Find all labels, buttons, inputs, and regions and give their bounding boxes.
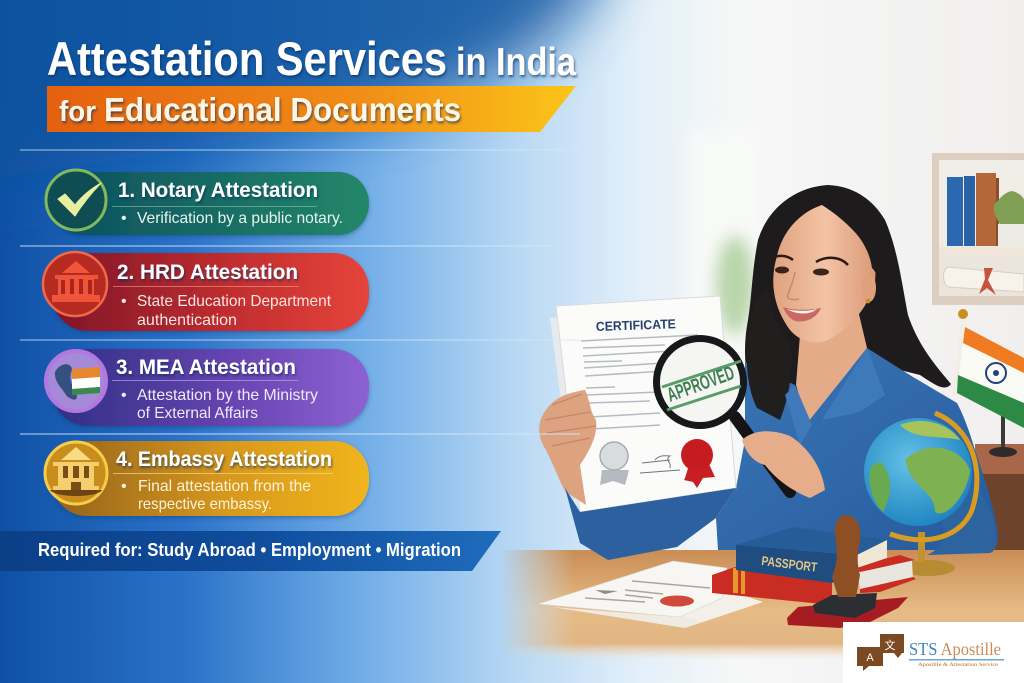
magnifying glass: [656, 338, 790, 492]
translate bubbles icon: [857, 634, 904, 671]
translate bubbles icon: A: [866, 652, 874, 664]
description: Verification by a public notary.: [137, 210, 343, 227]
cabinet: [975, 474, 1024, 554]
description: •: [121, 478, 127, 495]
heading: 4. Embassy Attestation: [116, 448, 332, 471]
description: of External Affairs: [137, 405, 258, 422]
hair back: [745, 185, 951, 420]
front hair strand over shoulder: [747, 290, 792, 420]
description: Final attestation from the: [138, 478, 311, 495]
left shirt sleeve: [565, 488, 736, 560]
collar: [785, 348, 885, 445]
desk papers: [538, 561, 763, 628]
subtitle ribbon: Educational Documents: [104, 91, 461, 128]
required for ribbon: [0, 531, 501, 571]
nose and smile: [788, 272, 799, 300]
woman: [716, 185, 998, 556]
icon: gold embassy: [45, 442, 107, 504]
description: Attestation by the Ministry: [137, 387, 318, 404]
passport and books: [712, 527, 916, 605]
required for ribbon: Required for: Study Abroad • Employment • Migration: [38, 540, 461, 560]
title: in India: [456, 41, 576, 84]
translate bubbles icon: 文: [884, 638, 896, 652]
rubber stamp on red pad: [787, 515, 908, 628]
front hair: [760, 190, 893, 340]
heading: 1. Notary Attestation: [118, 179, 318, 202]
divider lines: [20, 149, 610, 435]
globe: [864, 413, 977, 576]
ear and earring: [862, 274, 876, 302]
subtitle ribbon: for: [59, 96, 96, 128]
desk: [500, 550, 1024, 660]
logo panel: [843, 622, 1024, 683]
shelf with books, plant and scroll: [932, 153, 1024, 305]
panel: hrd attestation: [43, 252, 369, 331]
neck: [796, 310, 867, 423]
indian flag on stand: [955, 309, 1024, 457]
silver seal: [600, 442, 629, 485]
signature: [640, 456, 680, 473]
right hand: [742, 431, 825, 498]
cabinet top: [975, 444, 1024, 474]
window backdrop: [690, 130, 760, 370]
description: authentication: [137, 312, 237, 329]
red seal: [681, 439, 715, 488]
left hand: [539, 390, 596, 505]
icon: red government building: [43, 252, 107, 316]
description: •: [121, 387, 127, 404]
approved stamp text: APPROVED: [664, 362, 737, 407]
heading: 2. HRD Attestation: [117, 261, 298, 284]
certificate: [550, 296, 736, 512]
shirt: [716, 348, 998, 556]
icon: flag and globe: [46, 351, 106, 411]
icon: check mark: [46, 170, 106, 230]
brand name: STS Apostille: [909, 639, 1001, 659]
title: Attestation Services: [47, 32, 447, 85]
panel: mea attestation: [46, 349, 369, 426]
description: •: [121, 293, 127, 310]
brows and eyes: [772, 256, 848, 265]
subtitle ribbon: [47, 86, 576, 132]
description: State Education Department: [137, 293, 332, 310]
panel: embassy attestation: [45, 441, 369, 516]
certificate: CERTIFICATE: [596, 316, 676, 334]
right shirt elbow: [925, 470, 997, 555]
brand tagline: Apostille & Attestation Service: [918, 662, 999, 668]
passport label: PASSPORT: [761, 553, 818, 575]
panel: notary attestation: [46, 170, 369, 235]
description: •: [121, 210, 127, 227]
face: [773, 205, 878, 342]
description: respective embassy.: [138, 496, 272, 513]
heading: 3. MEA Attestation: [116, 356, 296, 379]
